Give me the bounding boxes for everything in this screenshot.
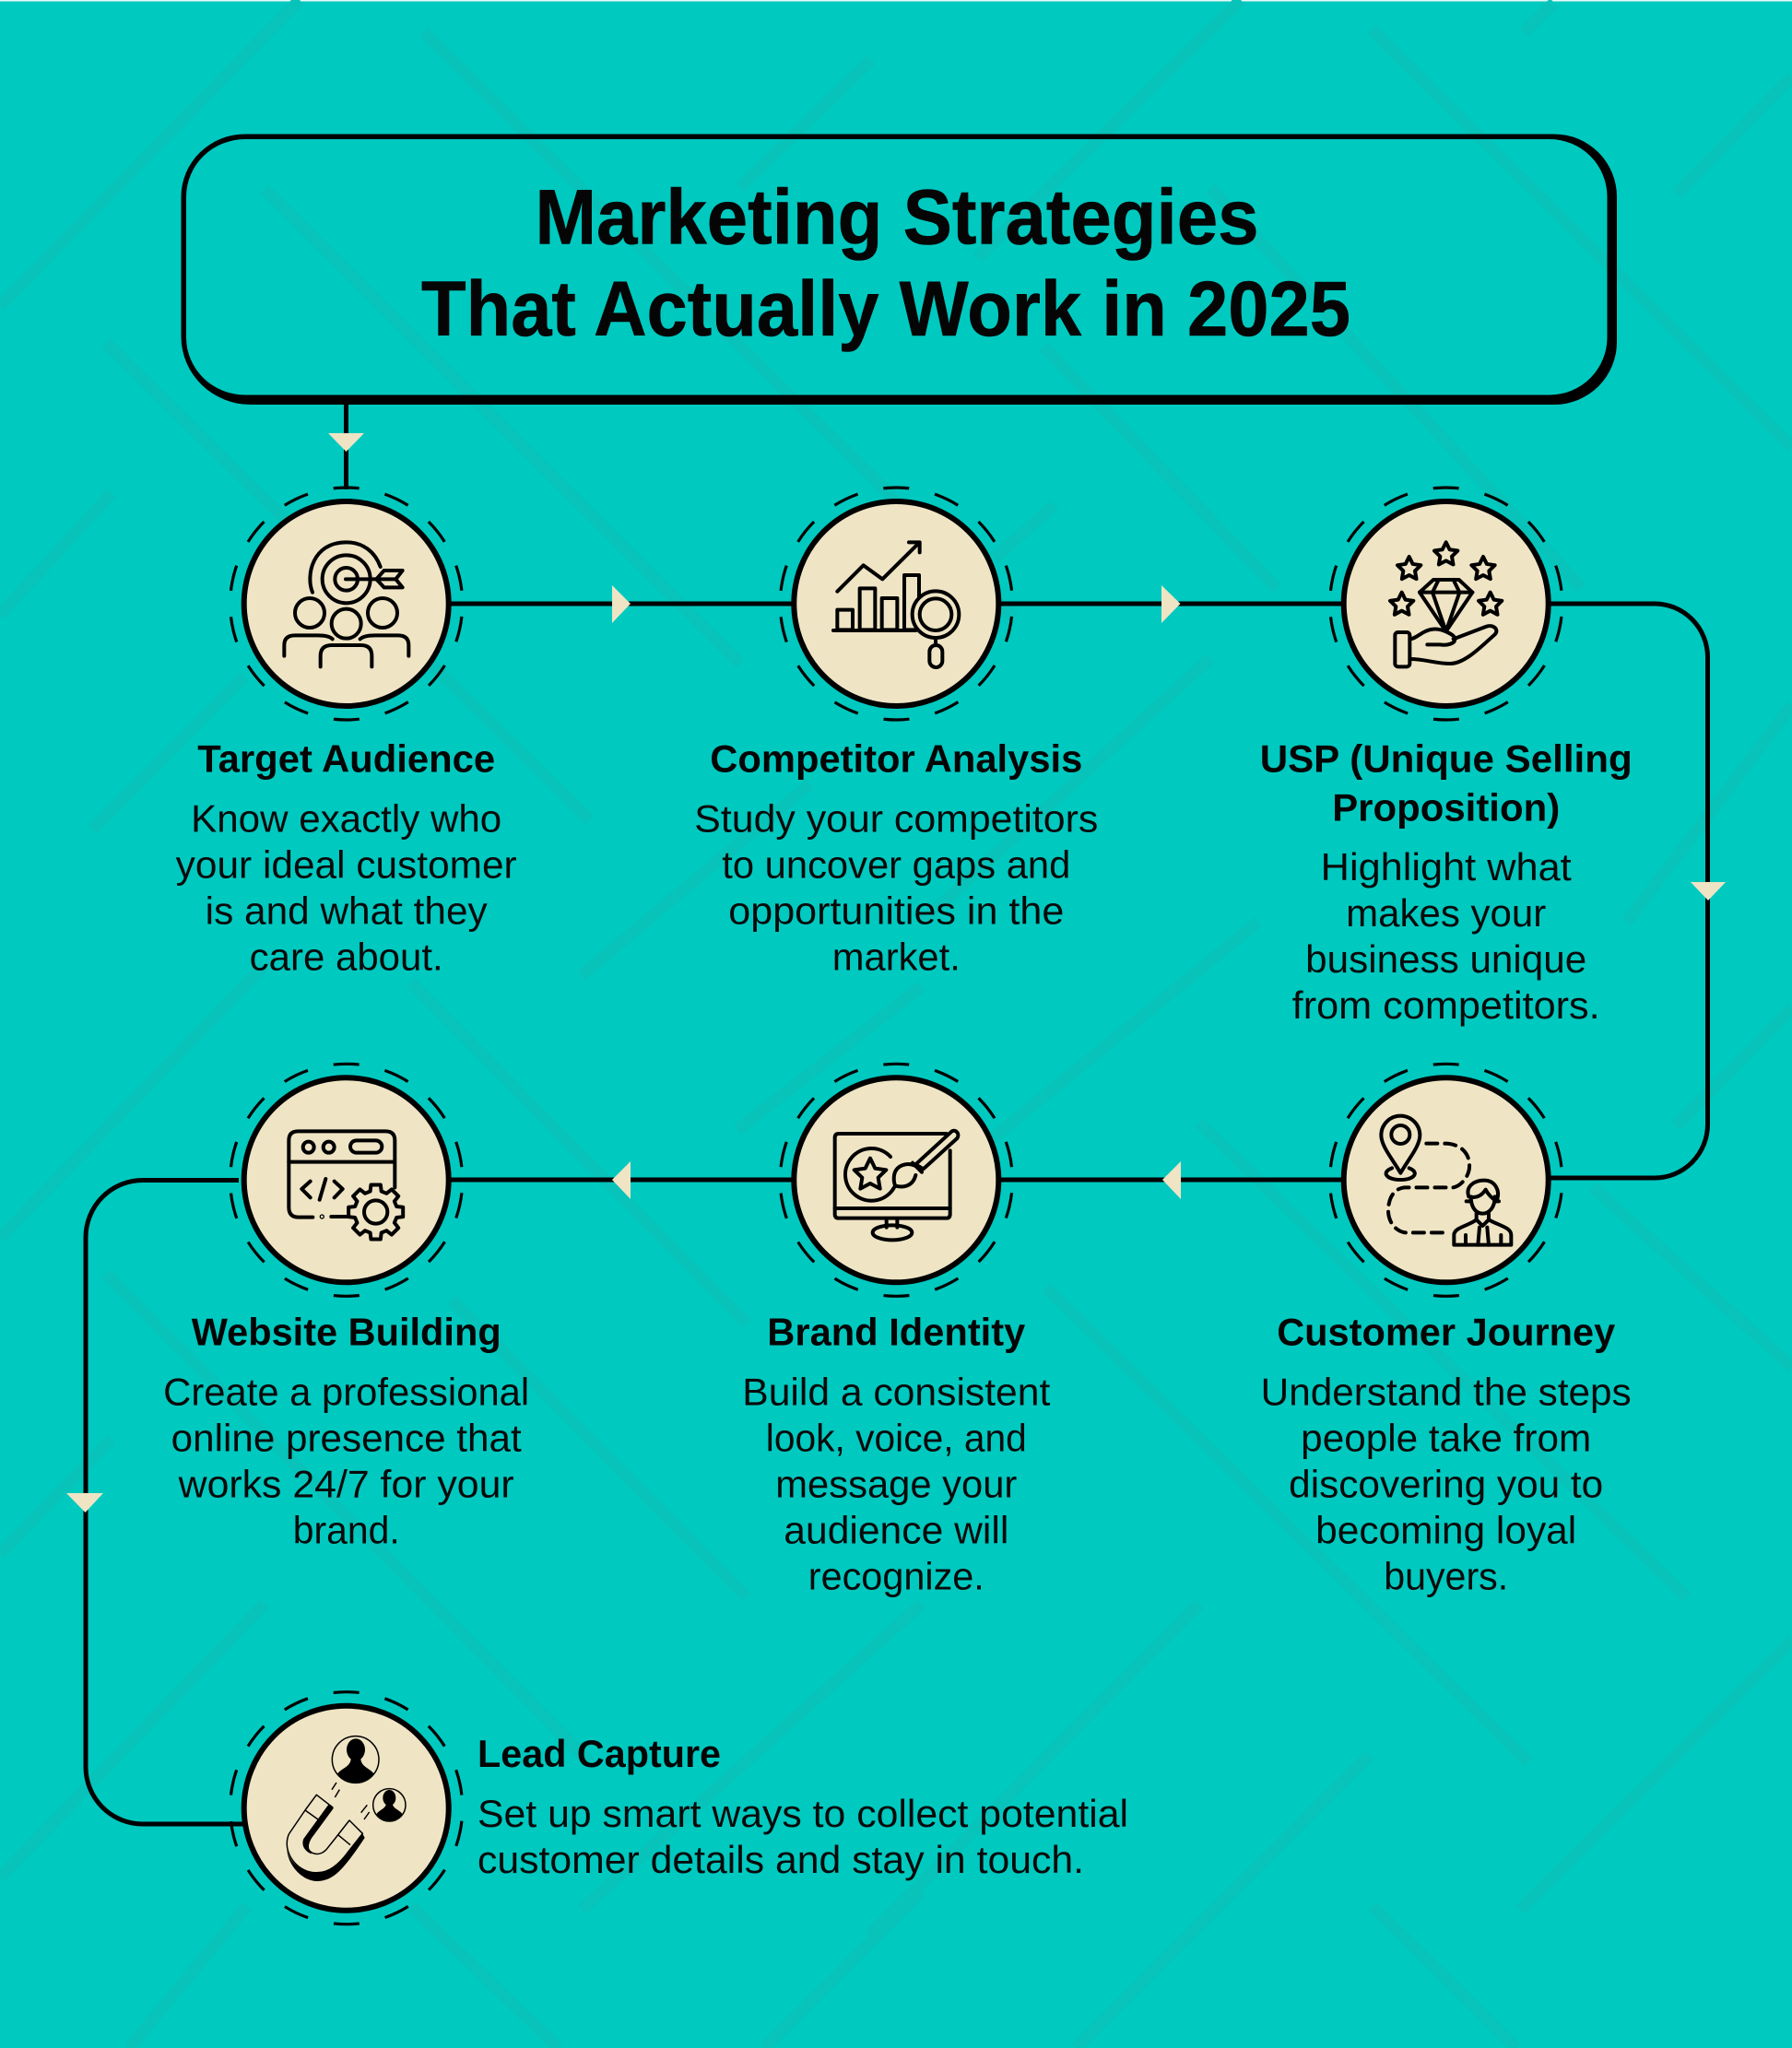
heading: Brand Identity [767, 1311, 1026, 1353]
description [176, 797, 517, 979]
description: Create a professional [163, 1371, 529, 1414]
description [1261, 1371, 1632, 1598]
heading: Website Building [192, 1311, 501, 1353]
icon: magnet attracting people [230, 1692, 463, 1924]
arrow: step 4 to step 5 [1162, 1161, 1181, 1199]
title box [181, 135, 1617, 405]
description [163, 1371, 529, 1552]
description: audience will [784, 1509, 1008, 1552]
description: makes your [1346, 891, 1546, 935]
arrow: step 5 to step 6 [612, 1161, 631, 1199]
heading [1260, 737, 1633, 830]
description [1292, 845, 1600, 1027]
step: Brand Identity [742, 1064, 1051, 1598]
icon: browser window with code and gear [230, 1064, 463, 1296]
description: buyers. [1384, 1555, 1508, 1598]
arrow: step 6 to step 7 [66, 1493, 103, 1512]
description: Understand the steps [1261, 1371, 1632, 1414]
description: market. [832, 936, 961, 979]
arrow: step 1 to step 2 [612, 585, 631, 623]
heading: Target Audience [197, 737, 495, 780]
icon: diamond in hand with stars [1330, 488, 1562, 720]
heading: USP (Unique Selling [1260, 737, 1633, 780]
heading: Proposition) [1332, 785, 1560, 830]
description: becoming loyal [1315, 1509, 1576, 1552]
description: works 24/7 for your [178, 1463, 514, 1506]
description: Highlight what [1321, 845, 1572, 889]
step: Lead Capture [230, 1692, 1128, 1924]
description: discovering you to [1289, 1463, 1603, 1506]
arrow: title to step 1 [328, 433, 364, 452]
step: Competitor Analysis [694, 488, 1098, 979]
title text [421, 173, 1350, 352]
description: message your [775, 1463, 1017, 1506]
arrow: step 3 to step 4 [1691, 882, 1726, 900]
description [742, 1371, 1051, 1598]
heading: Competitor Analysis [710, 737, 1082, 780]
description [694, 797, 1098, 979]
title text: Marketing Strategies [535, 173, 1259, 260]
description: brand. [293, 1509, 400, 1552]
heading: Customer Journey [1277, 1311, 1616, 1353]
description: online presence that [171, 1417, 522, 1460]
description: is and what they [206, 889, 488, 933]
description: your ideal customer [176, 843, 517, 887]
description [477, 1792, 1128, 1881]
icon: monitor with star and paintbrush [780, 1064, 1012, 1296]
description: business unique [1305, 937, 1586, 981]
connector path between steps [86, 404, 1707, 1824]
step: Customer Journey [1261, 1064, 1632, 1598]
icon: map pin, dashed route and person [1330, 1064, 1562, 1296]
step: Website Building [163, 1064, 529, 1552]
title text: That Actually Work in 2025 [421, 265, 1350, 352]
description: people take from [1301, 1417, 1591, 1460]
description: to uncover gaps and [722, 843, 1070, 887]
description: Know exactly who [191, 797, 501, 841]
description: Build a consistent [742, 1371, 1051, 1414]
arrow: step 2 to step 3 [1161, 585, 1180, 623]
step: Target Audience [176, 488, 517, 979]
description: care about. [250, 936, 443, 979]
icon: target and audience [230, 488, 463, 720]
description: look, voice, and [766, 1417, 1027, 1460]
description: recognize. [808, 1555, 984, 1598]
description: Set up smart ways to collect potential [477, 1792, 1128, 1835]
icon: chart and magnifier [780, 488, 1012, 720]
description: from competitors. [1292, 983, 1600, 1027]
heading: Lead Capture [477, 1732, 721, 1775]
description: customer details and stay in touch. [477, 1838, 1084, 1881]
description: opportunities in the [728, 889, 1064, 933]
step: USP [1260, 488, 1633, 1027]
description: Study your competitors [694, 797, 1098, 841]
